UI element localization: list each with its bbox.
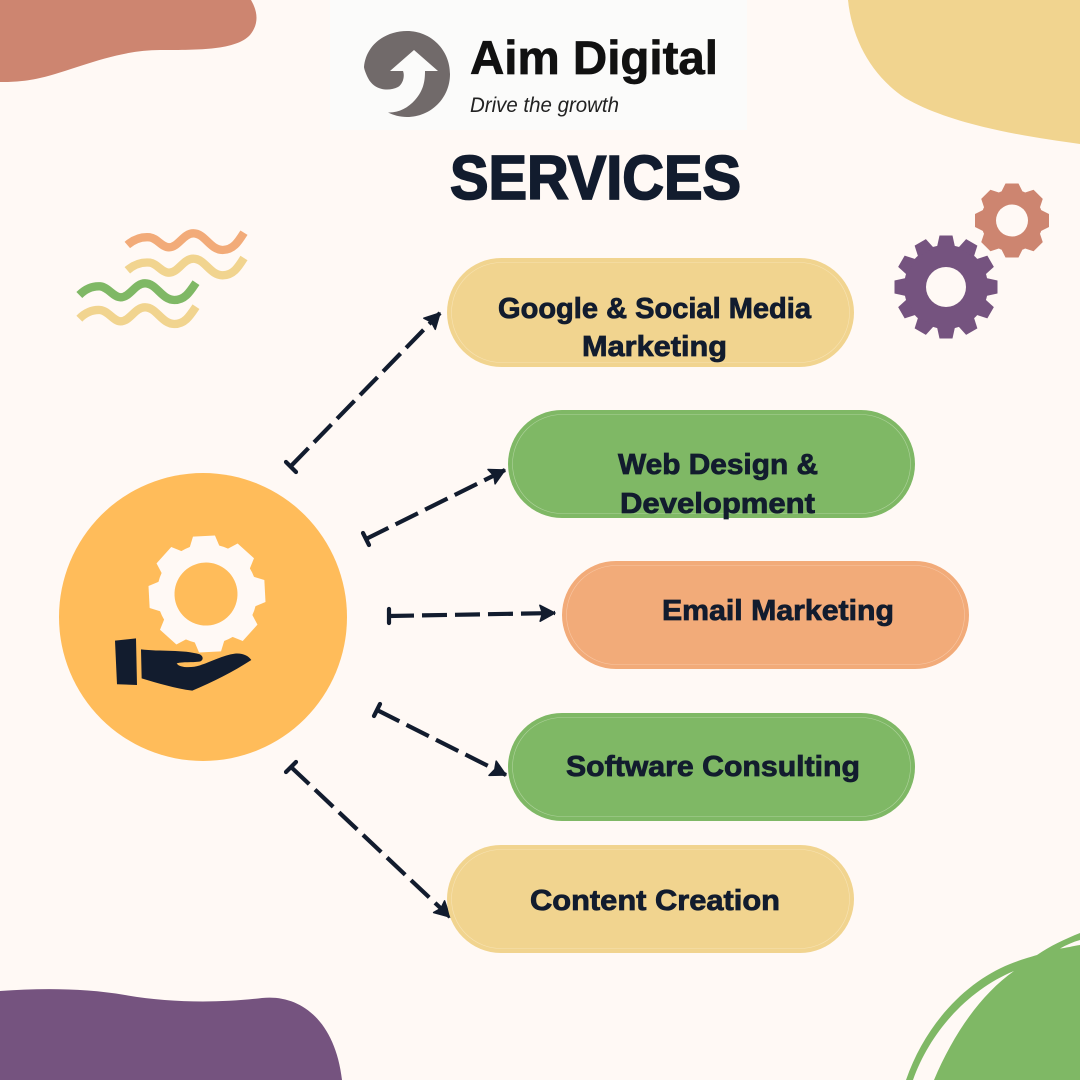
pill: Google and Social Media Marketing bbox=[447, 258, 854, 367]
pill: Software Consulting: Software Consulting bbox=[566, 751, 860, 783]
logo tagline: Drive the growth bbox=[470, 94, 619, 117]
pill: Email Marketing: Email Marketing bbox=[662, 595, 894, 627]
pill: Web Design and Development: Web Design & bbox=[618, 449, 818, 481]
icon: purple gear bbox=[894, 236, 998, 338]
pill: Google and Social Media Marketing: Marketing bbox=[582, 331, 727, 363]
logo panel bbox=[330, 0, 747, 130]
blob: bottom left bbox=[0, 989, 342, 1080]
icon: coral gear bbox=[975, 184, 1049, 258]
icon: hand bbox=[115, 638, 251, 691]
arrow to Google and Social Media Marketing bbox=[286, 313, 440, 472]
decorative wavy lines bbox=[79, 233, 244, 324]
central circle with hand and gear bbox=[59, 473, 347, 761]
pill: Web Design and Development: Development bbox=[620, 488, 815, 520]
pill: Web Design and Development bbox=[508, 410, 915, 520]
arrow to Software Consulting bbox=[374, 704, 506, 775]
blob: top left bbox=[0, 0, 256, 82]
arrow to Web Design and Development bbox=[363, 470, 505, 545]
icon: logo swirl with arrow bbox=[364, 31, 450, 117]
blob: bottom right bbox=[906, 933, 1080, 1080]
pill: Content Creation: Content Creation bbox=[530, 885, 780, 917]
logo name: Aim Digital bbox=[470, 31, 718, 84]
pill: Content Creation bbox=[447, 845, 854, 953]
pill: Email Marketing bbox=[562, 561, 969, 669]
blob: top right bbox=[848, 0, 1080, 144]
arrow to Email Marketing bbox=[389, 609, 555, 623]
pill: Software Consulting bbox=[508, 713, 915, 821]
icon: white gear bbox=[146, 533, 268, 655]
title: SERVICES bbox=[450, 144, 741, 213]
arrow to Content Creation bbox=[286, 762, 450, 917]
pill: Google and Social Media Marketing: Google & Social Media bbox=[498, 293, 812, 325]
